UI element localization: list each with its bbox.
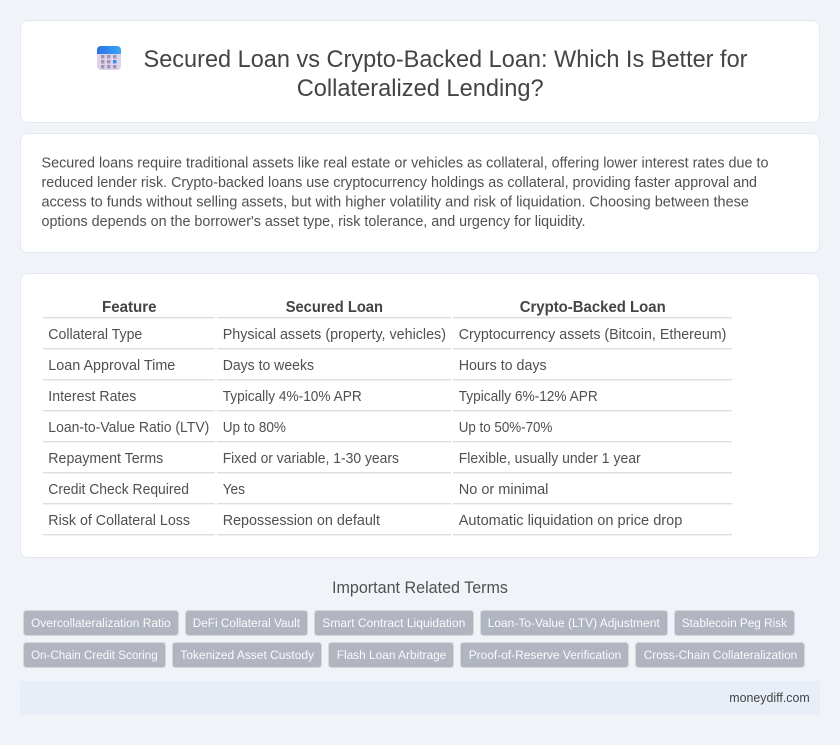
panel: title card bbox=[20, 20, 820, 122]
table row: collateral type bbox=[48, 327, 726, 343]
tag: defi collateral vault bbox=[186, 610, 308, 636]
tag: on-chain credit scoring bbox=[24, 642, 166, 668]
table row: risk of collateral loss: Risk of Collateral Loss bbox=[48, 513, 190, 529]
tag group: related terms bbox=[24, 610, 804, 668]
tag: flash loan arbitrage: Flash Loan Arbitrage bbox=[337, 648, 446, 662]
table row: interest rates: Typically 6%-12% APR bbox=[459, 389, 598, 405]
table row: risk of collateral loss: Repossession on default bbox=[223, 513, 380, 529]
tag: stablecoin peg risk: Stablecoin Peg Risk bbox=[682, 616, 788, 630]
icon: calendar bbox=[97, 46, 121, 70]
table header row: Secured Loan bbox=[286, 299, 383, 316]
tag: smart contract liquidation: Smart Contract Liquidation bbox=[322, 616, 465, 630]
table row: loan-to-value ratio: Up to 80% bbox=[223, 420, 286, 436]
summary text block: reduced lender risk. Crypto-backed loans use cryptocurrency holdings as collateral, providing faster approval and bbox=[42, 175, 757, 191]
table row: loan approval time: Days to weeks bbox=[223, 358, 314, 374]
panel: comparison table bbox=[20, 274, 820, 558]
summary text block: Secured loans require traditional assets like real estate or vehicles as collateral, offering lower interest rates due to bbox=[42, 155, 768, 171]
title: Collateralized Lending? bbox=[297, 75, 544, 102]
tag: ltv adjustment bbox=[480, 610, 668, 636]
table header row bbox=[102, 299, 666, 316]
table row: repayment terms: Fixed or variable, 1-30 years bbox=[223, 451, 399, 467]
tag: overcollateralization ratio bbox=[24, 610, 178, 636]
table header row: Crypto-Backed Loan bbox=[520, 299, 666, 316]
footer bar bbox=[20, 681, 820, 715]
table row: loan-to-value ratio: Up to 50%-70% bbox=[459, 420, 552, 436]
table row: collateral type: Physical assets (property, vehicles) bbox=[223, 327, 446, 343]
table row: interest rates bbox=[48, 389, 598, 405]
tag: tokenized asset custody bbox=[172, 642, 322, 668]
table row: credit check required: Credit Check Required bbox=[48, 482, 189, 498]
summary text block bbox=[42, 155, 768, 230]
title: Secured Loan vs Crypto-Backed Loan: Which Is Better for bbox=[144, 46, 748, 73]
table row: collateral type: Cryptocurrency assets (Bitcoin, Ethereum) bbox=[459, 327, 726, 343]
table row: interest rates: Interest Rates bbox=[48, 389, 136, 405]
tag: tokenized asset custody: Tokenized Asset Custody bbox=[180, 648, 315, 662]
summary text block: access to funds without selling assets, but with higher volatility and risk of liquidation. Choosing between these bbox=[42, 194, 749, 210]
table row: interest rates: Typically 4%-10% APR bbox=[223, 389, 362, 405]
tag: cross-chain collateralization bbox=[636, 642, 804, 668]
table row: collateral type: Collateral Type bbox=[48, 327, 142, 343]
table row: repayment terms: Repayment Terms bbox=[48, 451, 163, 467]
heading: important related terms: Important Related Terms bbox=[332, 579, 508, 597]
table row: risk of collateral loss: Automatic liquidation on price drop bbox=[459, 513, 682, 529]
tag: stablecoin peg risk bbox=[674, 610, 794, 636]
footer source credit: moneydiff.com bbox=[729, 690, 810, 705]
tag: ltv adjustment: Loan-To-Value (LTV) Adjustment bbox=[488, 616, 660, 630]
tag: cross-chain collateralization: Cross-Chain Collateralization bbox=[644, 648, 797, 662]
table row: loan approval time: Loan Approval Time bbox=[48, 358, 175, 374]
table header row: Feature bbox=[102, 299, 157, 316]
tag: flash loan arbitrage bbox=[328, 642, 454, 668]
table row: loan-to-value ratio: Loan-to-Value Ratio (LTV) bbox=[48, 420, 209, 436]
tag: overcollateralization ratio: Overcollateralization Ratio bbox=[31, 616, 171, 630]
tag: proof-of-reserve verification bbox=[460, 642, 628, 668]
table row: loan approval time: Hours to days bbox=[459, 358, 547, 374]
table row: loan-to-value ratio bbox=[48, 420, 552, 436]
table row: repayment terms bbox=[48, 451, 641, 467]
title bbox=[144, 46, 748, 102]
table row: loan approval time bbox=[48, 358, 547, 374]
table row: repayment terms: Flexible, usually under 1 year bbox=[459, 451, 641, 467]
tag: on-chain credit scoring: On-Chain Credit Scoring bbox=[31, 648, 158, 662]
panel: summary bbox=[20, 134, 820, 252]
tag: defi collateral vault: DeFi Collateral Vault bbox=[193, 616, 301, 630]
table row: credit check required bbox=[48, 482, 548, 498]
table row: credit check required: Yes bbox=[223, 482, 245, 498]
tag: smart contract liquidation bbox=[314, 610, 474, 636]
summary text block: options depends on the borrower's asset type, risk tolerance, and urgency for liquidity. bbox=[42, 214, 586, 230]
tag: proof-of-reserve verification: Proof-of-Reserve Verification bbox=[469, 648, 621, 662]
table row: risk of collateral loss bbox=[48, 513, 682, 529]
table row: credit check required: No or minimal bbox=[459, 482, 548, 498]
